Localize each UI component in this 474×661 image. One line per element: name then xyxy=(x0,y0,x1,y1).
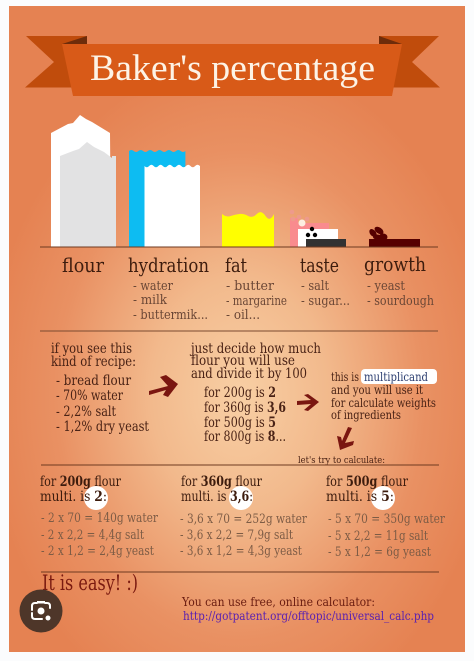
calculate caption: let's try to calculate: xyxy=(298,455,385,466)
multiplicand text: and you will use it xyxy=(331,383,423,397)
multiplicand text: this is xyxy=(331,370,359,384)
arrow: flour to multiplicand xyxy=(297,394,319,411)
column: 200g: multi. is 2: xyxy=(40,489,107,505)
recipe text: - 2,2% salt xyxy=(56,404,116,420)
recipe text: kind of recipe: xyxy=(51,354,136,370)
ingredient category labels: taste xyxy=(300,254,339,277)
flour division text xyxy=(189,341,321,445)
ingredient examples: - salt xyxy=(301,279,330,294)
multiplicand highlight xyxy=(361,369,437,384)
multiplicand text xyxy=(331,370,436,422)
icon: taste blocks xyxy=(290,210,346,247)
ingredient examples: - sugar... xyxy=(301,294,350,309)
multiplicand text: multiplicand xyxy=(364,370,428,384)
closing statement: It is easy! :) xyxy=(42,571,138,595)
recipe text xyxy=(51,341,149,435)
title: Baker's percentage xyxy=(90,48,375,89)
column: 500g: - 5 x 1,2 = 6g yeast xyxy=(328,545,432,560)
ingredient examples: - milk xyxy=(133,293,167,308)
column: 200g: - 2 x 2,2 = 4,4g salt xyxy=(41,528,145,543)
flour division text: for 500g is 5 xyxy=(204,415,276,431)
ingredient examples: - oil... xyxy=(226,308,260,323)
ingredient category labels: hydration xyxy=(128,254,209,277)
column: 360g xyxy=(180,474,308,559)
column: 500g: multi. is 5: xyxy=(326,489,394,505)
column: 360g: - 3,6 x 1,2 = 4,3g yeast xyxy=(180,544,303,559)
column: 500g xyxy=(326,474,446,560)
column: 200g: - 2 x 1,2 = 2,4g yeast xyxy=(41,544,155,559)
recipe text: - bread flour xyxy=(56,373,131,389)
calculator note: You can use free, online calculator: xyxy=(181,595,375,609)
ingredient category labels: flour xyxy=(62,254,105,277)
icon: fat block xyxy=(222,212,274,247)
recipe text: if you see this xyxy=(51,341,132,357)
column: 200g xyxy=(40,474,159,559)
icon: growth block xyxy=(368,225,420,247)
column: 360g: - 3,6 x 70 = 252g water xyxy=(180,512,308,527)
arrow: recipe to flour xyxy=(149,375,178,397)
multiplicand text: of ingredients xyxy=(331,408,401,422)
icon: lens button xyxy=(20,590,62,632)
recipe text: - 1,2% dry yeast xyxy=(56,419,149,435)
ingredient examples: - yeast xyxy=(367,279,406,294)
column: 500g: - 5 x 2,2 = 11g salt xyxy=(328,529,429,544)
icon: hydration bags xyxy=(129,150,200,247)
title ribbon xyxy=(25,36,440,96)
recipe text: - 70% water xyxy=(56,388,123,404)
ingredient examples: - sourdough xyxy=(367,294,435,309)
multiplicand text: for calculate weights xyxy=(331,396,436,410)
flour division text: for 360g is 3,6 xyxy=(204,400,286,416)
ingredient category labels xyxy=(62,253,426,277)
flour division text: and divide it by 100 xyxy=(191,366,307,382)
ingredient examples: - butter xyxy=(226,279,275,294)
column: 360g: for 360g flour xyxy=(181,474,262,490)
column: 500g: - 5 x 70 = 350g water xyxy=(328,512,446,527)
flour division text: flour you will use xyxy=(191,353,295,369)
ingredient category labels: fat xyxy=(225,254,247,277)
flour division text: for 200g is 2 xyxy=(204,385,276,401)
column: 500g: for 500g flour xyxy=(326,474,408,490)
flour division text: for 800g is 8... xyxy=(204,429,286,445)
icon: flour bags xyxy=(51,115,116,247)
column: 200g: - 2 x 70 = 140g water xyxy=(41,511,159,526)
ingredient examples: - water xyxy=(133,279,174,294)
chart baseline xyxy=(40,246,438,248)
column: 360g: - 3,6 x 2,2 = 7,9g salt xyxy=(180,528,294,543)
ingredient examples: - margarine xyxy=(226,294,287,309)
ingredient examples: - buttermik... xyxy=(133,308,208,323)
ingredient bar chart xyxy=(51,115,420,247)
ingredient category labels: growth xyxy=(364,253,426,276)
ingredient examples xyxy=(133,279,435,323)
column: 200g: for 200g flour xyxy=(40,474,121,490)
column: 360g: multi. is 3,6: xyxy=(181,489,253,505)
calculator link: http://gotpatent.org/offtopic/universal_calc.php xyxy=(183,609,434,623)
flour division text: just decide how much xyxy=(189,341,321,357)
arrow: down to calculation xyxy=(337,427,354,450)
